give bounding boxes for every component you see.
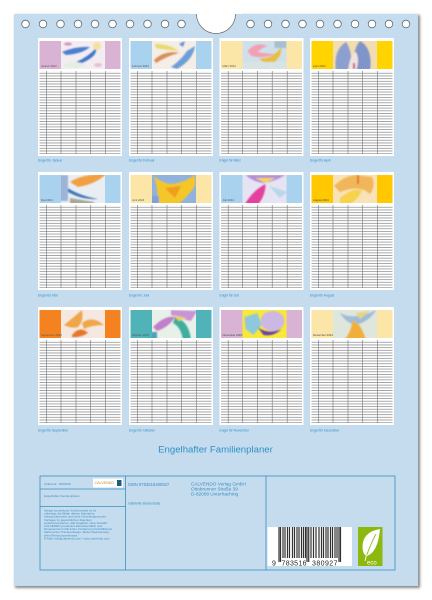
publisher logo (93, 478, 123, 488)
caption: March: Engel für März (220, 158, 241, 162)
ISBN: ISBN 9783516380927 (128, 482, 170, 487)
caption: July: Engel für Juli (220, 294, 239, 298)
legal notice: beim Ressourceneinsatz. (44, 533, 78, 537)
panel: July (220, 172, 304, 290)
barcode: 783516 (282, 560, 307, 568)
panel: December: Dezember 2024 (313, 333, 333, 337)
panel: May: Mai 2024 (41, 198, 53, 202)
imprint frame (40, 476, 395, 570)
panel: September (38, 307, 122, 425)
painting: October angel (152, 310, 196, 338)
caption: December: Engel für Dezember (310, 428, 340, 432)
publisher logo: CALVENDO (94, 481, 114, 485)
legal notice: E-Mail: info@calvendo.com / www.calvendo.com (44, 536, 110, 540)
barcode: 9 (272, 560, 276, 568)
panel: August: August 2024 (313, 198, 329, 202)
painting: April angel (335, 41, 371, 71)
caption: May: Engel für Mai (38, 294, 58, 298)
panel: January: Januar 2024 (41, 64, 57, 68)
caption: October: Engel für Oktober (129, 428, 156, 432)
legal notice: Verlages zu gewerblichen Zwecken (44, 518, 92, 522)
painting: November angel (244, 311, 284, 335)
panel: November: November 2024 (222, 333, 243, 337)
panel: April (310, 38, 394, 156)
legal notice: klimaneutral in DE & EU. Förderung CO2-Effizienz (44, 527, 112, 531)
caption: January: Engel für Januar (38, 158, 63, 162)
publisher address: D-82008 Unterhaching (191, 492, 239, 496)
publisher address: CALVENDO Verlag GmbH (191, 482, 246, 486)
binding notch (190, 0, 242, 34)
panel: September: September 2024 (41, 333, 62, 337)
publisher address: Ottobrunner Straße 39 (191, 486, 238, 492)
panel: February: Februar 2024 (132, 64, 149, 68)
caption: February: Engel für Februar (129, 158, 156, 162)
painting: July angel (246, 175, 288, 205)
panel: April: April 2024 (313, 64, 326, 68)
painting: February angel (154, 41, 195, 69)
panel: March: März 2024 (222, 64, 236, 68)
legal notice: dank kurzer Transportwege. Aktive Reduzierung (44, 530, 109, 534)
caption: June: Engel für Juni (129, 294, 149, 298)
legal notice: weiterzuverwerten. Alle Angaben ohne Gewähr. (44, 521, 108, 525)
author: Gabrielle-Diana Bode (128, 502, 161, 506)
panel: May (38, 172, 122, 290)
legal notice: unbefugt, die Bilder dieses Kalenders (44, 512, 95, 516)
product name: Engelhafter Familienplaner (44, 494, 80, 498)
panel: February (129, 38, 213, 156)
caption: April: Engel für April (310, 158, 331, 162)
panel: March (220, 38, 304, 156)
panel: July: Juli 2024 (222, 198, 234, 202)
article number: Artikel-Nr.: 2053108 (44, 482, 71, 486)
title: Engelhafter Familienplaner (158, 444, 274, 456)
icon: eco leaf badge: eco (367, 560, 377, 566)
legal notice: CALVENDO produziert klimafreundlich und (44, 524, 102, 528)
painting: August angel (334, 175, 374, 205)
panel: June: Juni 2024 (132, 198, 145, 202)
painting: May angel (61, 175, 105, 203)
barcode (268, 527, 352, 568)
painting: June angel (150, 175, 195, 205)
icon: eco leaf badge (358, 527, 382, 566)
barcode: 380927 (312, 560, 338, 568)
panel: January (38, 38, 122, 156)
painting: December angel (340, 310, 376, 340)
panel: June (129, 172, 213, 290)
panel: August (310, 172, 394, 290)
panel: October (129, 307, 213, 425)
painting: March angel (242, 41, 286, 69)
panel: October: Oktober 2024 (132, 333, 149, 337)
caption: August: Engel für August (310, 294, 334, 298)
panel: November (220, 307, 304, 425)
painting: January angel (62, 42, 102, 68)
panel: December (310, 307, 394, 425)
caption: November: Engel für November (220, 428, 250, 432)
spiral holes (22, 20, 410, 28)
caption: September: Engel für September (38, 428, 69, 432)
painting: September angel (64, 310, 104, 337)
legal notice: herauszutrennen und ohne Genehmigung des (44, 515, 107, 519)
legal notice: Infolge kostenloser Schutzrechte ist es (44, 508, 97, 512)
